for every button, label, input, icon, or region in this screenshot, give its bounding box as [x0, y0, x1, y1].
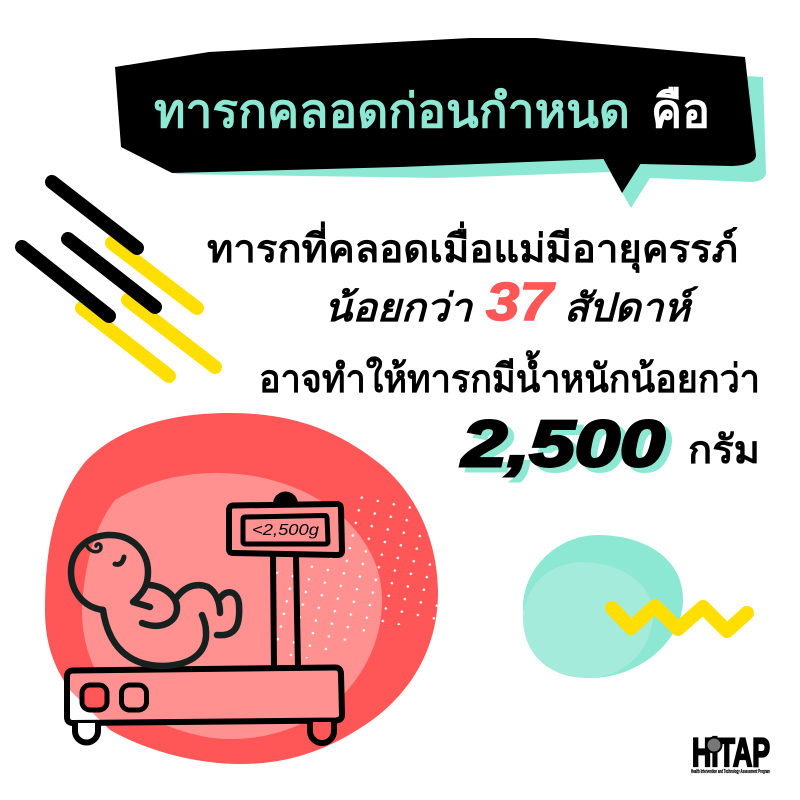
scale display knob [273, 492, 298, 504]
title word: คือ [651, 84, 710, 137]
definition line 2: น้อยกว่า [324, 287, 474, 330]
left foot [75, 723, 98, 742]
bubble black shape [115, 38, 756, 193]
white dots [276, 493, 438, 658]
weight line: อาจทำให้ทารกมีน้ำหนักน้อยกว่า [259, 350, 760, 401]
dark mint blob [523, 535, 683, 678]
illustration: baby on scale [45, 413, 440, 764]
number 2,500 with shadow: 2,500 [460, 407, 665, 480]
red blob [45, 413, 438, 764]
right foot [310, 722, 334, 743]
mint blob decoration [523, 535, 683, 678]
bubble mint shadow [174, 76, 766, 208]
scale display panel [229, 504, 342, 555]
diagonal stripes decoration [22, 182, 215, 376]
weight reading: <2,500g [252, 522, 319, 539]
title text: ทารกคลอดก่อนกำหนด [154, 84, 630, 137]
scale post [273, 556, 298, 668]
number 2,500 with shadow: 2,500 [466, 412, 671, 485]
button two [122, 685, 146, 710]
number 37: 37 [486, 272, 556, 332]
light mint blob [523, 562, 653, 678]
logo globe [706, 738, 722, 752]
definition line 2 [324, 272, 699, 332]
unit grams: กรัม [688, 429, 760, 472]
button one [82, 685, 107, 710]
yellow zigzag [612, 606, 747, 631]
definition line 1: ทารกที่คลอดเมื่อแม่มีอายุครรภ์ [207, 221, 738, 273]
baby [71, 535, 239, 666]
light pink blob [82, 473, 382, 739]
speech bubble title [115, 38, 766, 208]
scale platform [67, 668, 342, 743]
definition line 2: สัปดาห์ [564, 286, 699, 330]
